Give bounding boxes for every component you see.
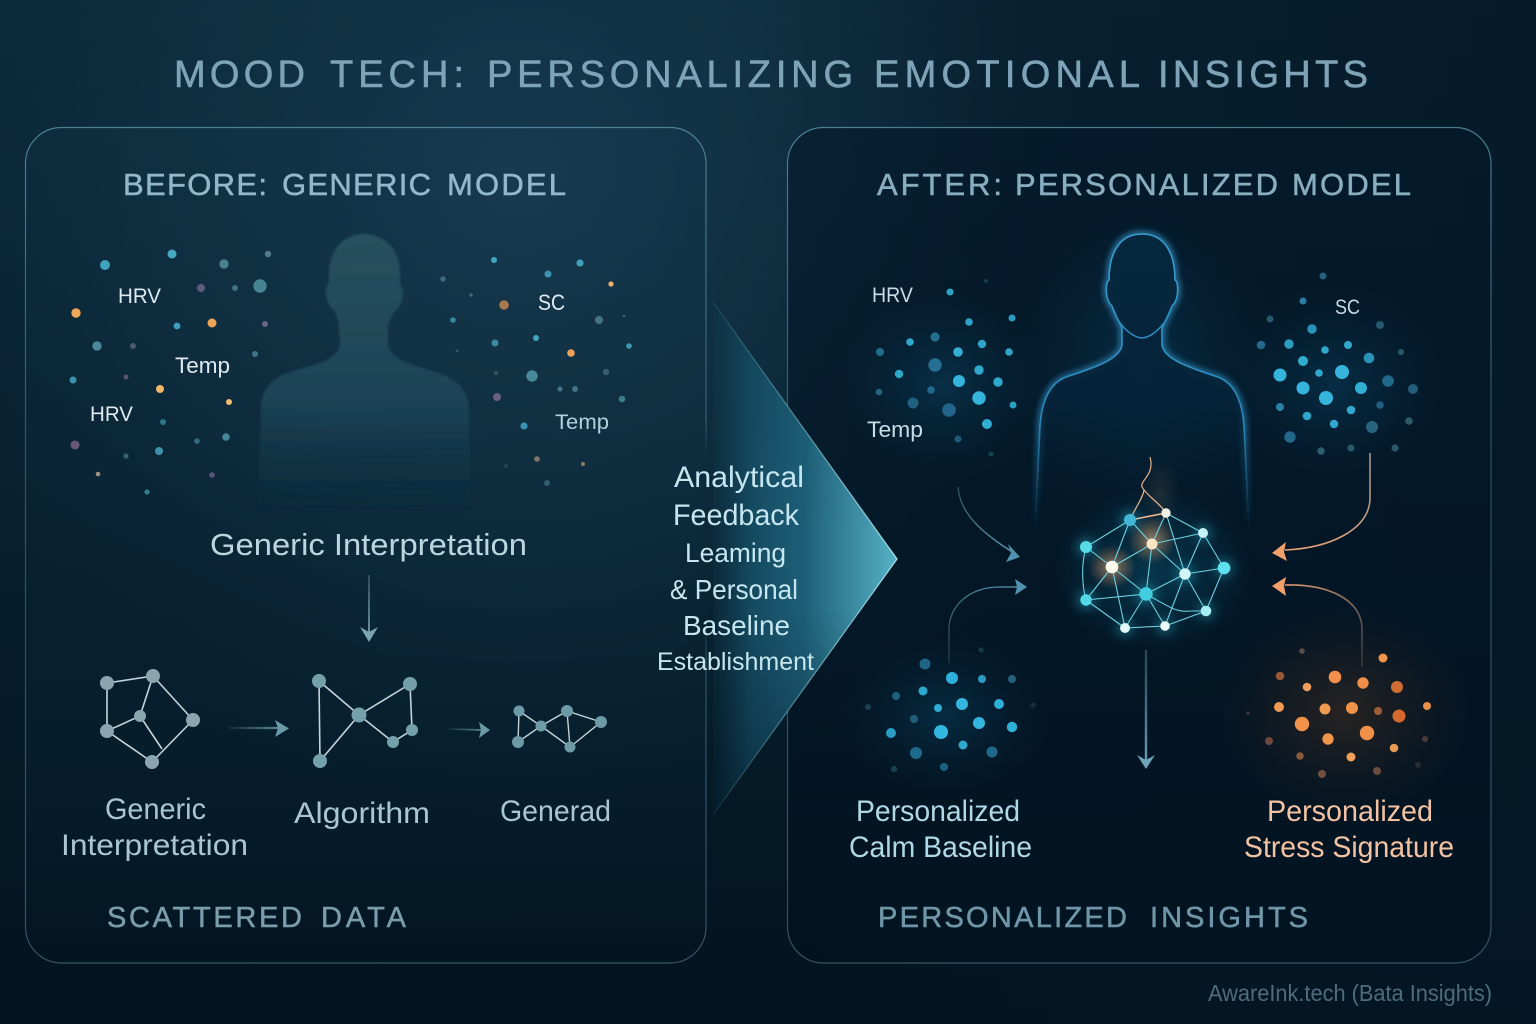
network glow [1053, 488, 1253, 652]
text: generic interpretation: Generic Interpretation [210, 527, 527, 562]
wedge text: Leaming [685, 538, 786, 568]
scattered data dots: left [70, 250, 271, 495]
data labels: left cluster [90, 284, 609, 434]
section label: scattered data: SCATTERED [107, 902, 302, 934]
wedge text: Analytical [674, 461, 804, 494]
panel: before generic model [26, 128, 706, 963]
title: MOOD [174, 54, 305, 96]
wedge shape [713, 302, 897, 815]
glows behind clusters [840, 200, 1470, 817]
cluster: SC blue dots [1257, 272, 1418, 455]
arrow: SC cluster to network [1272, 453, 1370, 561]
heading: after: PERSONALIZED [1015, 167, 1278, 202]
arrow: calm baseline to network [949, 579, 1027, 663]
title: TECH: [330, 54, 464, 96]
transition arrow: analytical feedback [657, 302, 897, 815]
section label: personalized insights: PERSONALIZED [878, 902, 1127, 934]
network: personalized neural graph [1053, 457, 1253, 652]
left panel border occlusion [704, 420, 708, 660]
panel: after personalized model [788, 128, 1491, 963]
section label: scattered data: DATA [321, 902, 407, 934]
wedge text: Establishment [657, 648, 814, 676]
heading: before [123, 167, 566, 202]
heading: after [877, 167, 1411, 202]
cluster: calm baseline dots [865, 647, 1036, 772]
network nodes [1080, 508, 1230, 633]
arrow: HRV cluster to network [958, 487, 1020, 562]
heading: after: MODEL [1292, 167, 1411, 202]
data labels: left cluster: Temp [555, 410, 609, 434]
flow labels: Generic [105, 793, 206, 826]
cluster: stress signature dots [1246, 648, 1431, 778]
heading: after: AFTER: [877, 167, 1002, 202]
data labels: right cluster: HRV [872, 284, 913, 307]
scattered data dots: right [440, 257, 632, 486]
footer credit: AwareInk.tech (Bata Insights) [1208, 980, 1492, 1006]
wedge edge [713, 302, 897, 815]
network: generic interpretation [100, 669, 200, 769]
title: PERSONALIZING [487, 54, 853, 96]
arrow: stress signature to network [1272, 577, 1362, 667]
cluster: HRV blue dots [876, 279, 1016, 456]
silhouette: generic person [257, 234, 471, 515]
flow labels: Algorithm [294, 797, 430, 830]
data labels: left cluster: HRV [118, 284, 162, 308]
title [174, 54, 1368, 96]
flow labels: Generad [500, 795, 611, 828]
flow labels: Interpretation [61, 829, 248, 862]
arrow: network to insights [1137, 650, 1155, 769]
heading: before: BEFORE: [123, 167, 267, 202]
arrow: generic to algorithm [229, 720, 289, 737]
section label: scattered data [107, 902, 407, 934]
data labels: left cluster: HRV [90, 402, 134, 426]
data labels: right cluster: Temp [867, 417, 923, 442]
title: EMOTIONAL [874, 54, 1140, 96]
silhouette: personalized person [1035, 234, 1249, 530]
data labels: right cluster [867, 284, 1360, 442]
wedge text [657, 461, 814, 676]
section label: personalized insights [878, 902, 1308, 934]
label: personalized stress signature: Personalized [1267, 795, 1433, 828]
wedge shading [713, 302, 897, 815]
label: personalized calm baseline: Personalized [856, 795, 1020, 828]
network: generad [512, 705, 607, 752]
data labels: left cluster: Temp [175, 353, 230, 378]
data labels: left cluster: SC [538, 290, 565, 315]
title: INSIGHTS [1158, 54, 1368, 96]
arrow: down to algorithm flow [360, 575, 378, 642]
arrow: algorithm to generad [449, 722, 490, 738]
node halos [1078, 512, 1232, 635]
label: personalized stress signature: Stress Signature [1244, 831, 1454, 864]
data labels: right cluster: SC [1335, 296, 1360, 319]
warm node glow [1088, 458, 1180, 589]
network edges [1083, 513, 1224, 628]
wavy orange signal [1130, 457, 1166, 520]
label: personalized calm baseline: Calm Baseline [849, 831, 1032, 864]
wedge text: Feedback [673, 499, 800, 532]
label: personalized stress signature [1244, 795, 1454, 864]
wedge text: & Personal [670, 574, 798, 605]
label: personalized calm baseline [849, 795, 1032, 864]
heading: before: MODEL [447, 167, 566, 202]
flow labels [61, 793, 611, 862]
heading: before: GENERIC [282, 167, 431, 202]
network: algorithm [312, 674, 418, 768]
section label: personalized insights: INSIGHTS [1150, 902, 1308, 934]
wedge text: Baseline [683, 610, 790, 641]
